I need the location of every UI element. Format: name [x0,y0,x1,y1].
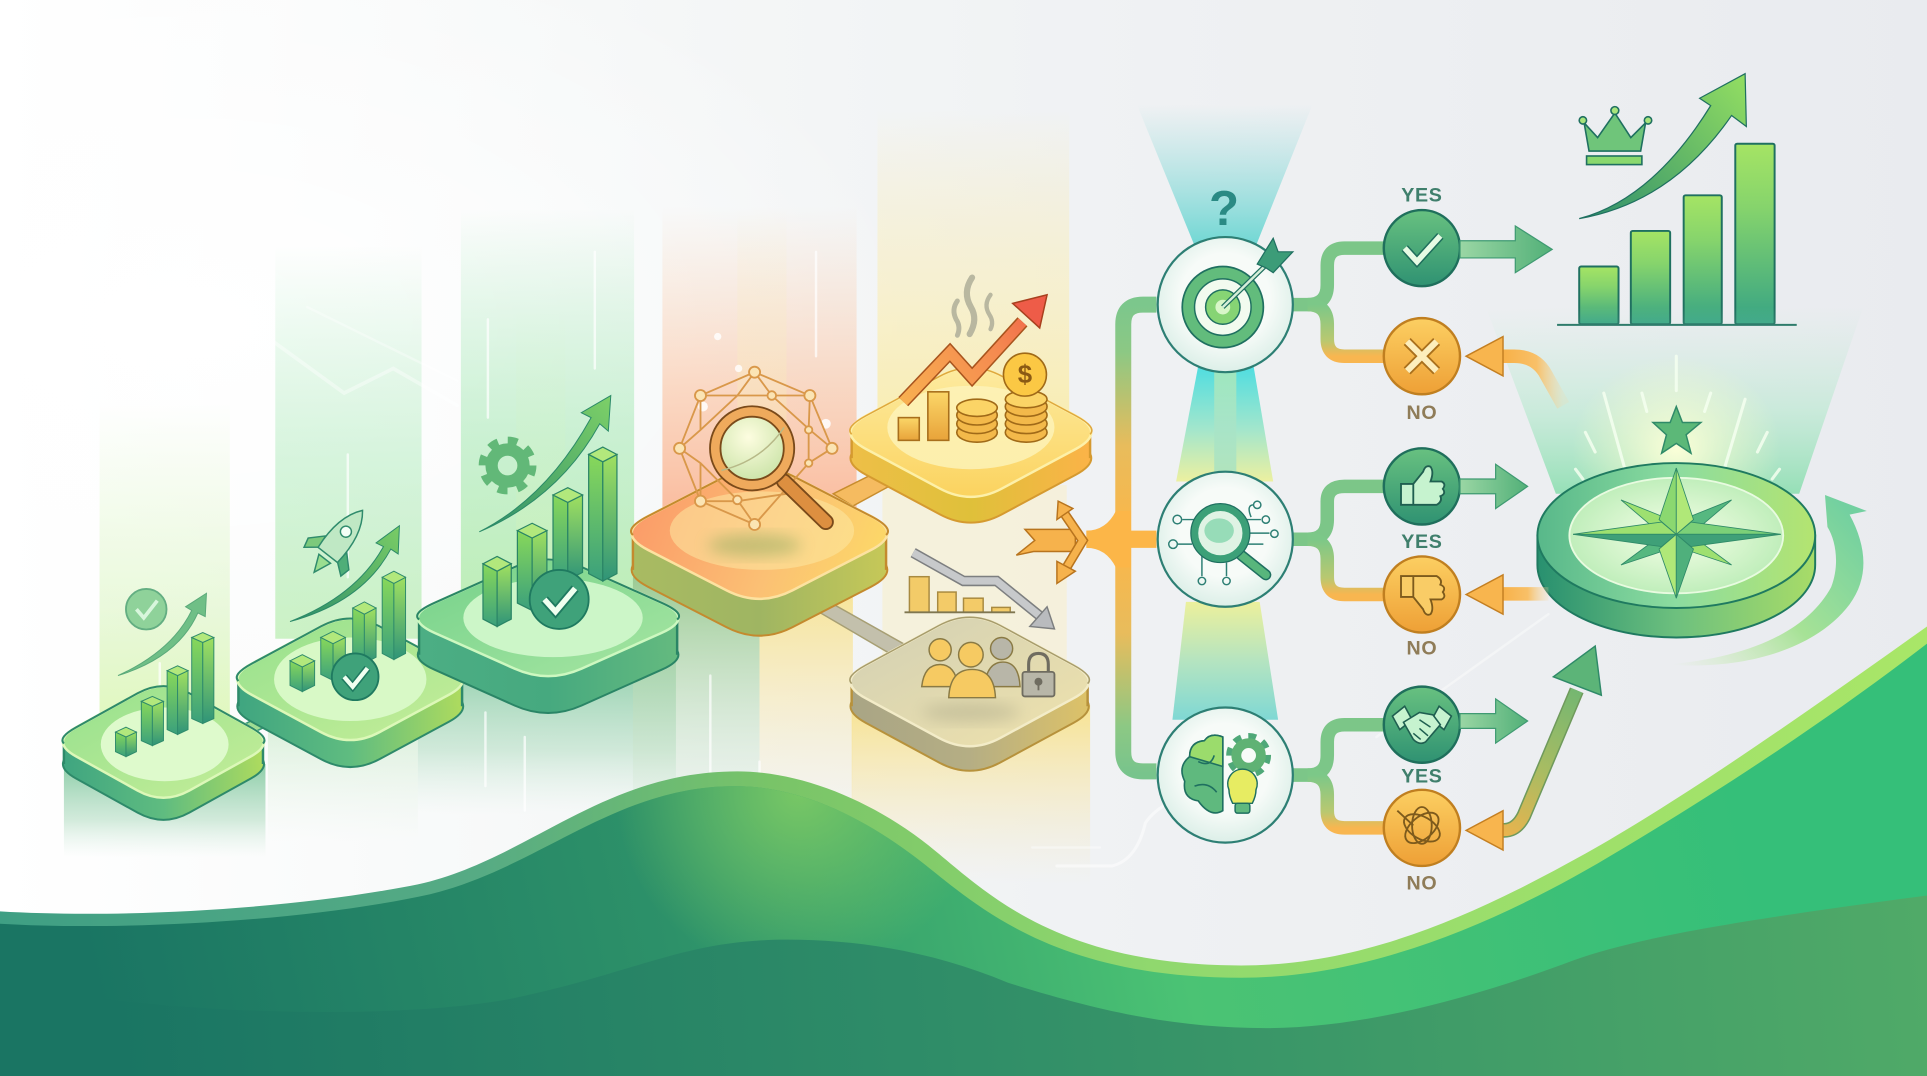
icon: crown [1579,107,1652,165]
yes label 1: YES [1401,184,1442,206]
bar chart [116,633,214,757]
flow bus to decision circles [1086,305,1156,771]
panel: platform 3 [417,396,679,713]
arrow: falling trend [913,553,1054,629]
bar chart [1579,144,1775,324]
icon: steam [954,278,992,335]
icon: rocket [294,494,383,588]
icon: bulb [1228,769,1257,813]
panel: connector bands [804,464,907,653]
icon: gear [1229,736,1268,775]
bar chart [898,392,949,440]
icon: people [922,637,1020,698]
bar chart [483,447,617,626]
compass light beam [1486,307,1863,494]
arrow: circular [1666,495,1867,666]
bar chart: decline [905,577,1015,612]
decision beams [1137,104,1313,720]
icon: compass star [1573,468,1781,598]
icon: coins [957,353,1047,442]
no label 1: NO [1407,402,1437,424]
no node: thumbs down [1384,556,1460,633]
green wave footer [0,626,1927,1076]
icon: check [332,653,379,700]
panel: platform 6 (team) [850,553,1089,771]
arrow: no 1 [1466,337,1563,405]
no label 2: NO [1407,638,1437,660]
bar chart [290,571,406,692]
yes node: handshake [1384,687,1460,763]
icon: magnifier [715,411,826,522]
no node: tangle [1384,790,1460,866]
background light columns [64,111,1090,884]
arrow: yes 1 [1460,226,1552,273]
branch lines [1290,248,1389,828]
panel: platform 1 [62,589,264,820]
yes node: check [1384,210,1460,286]
icon: brain [1182,735,1223,813]
arrow: no 3 to compass [1466,646,1601,850]
arrow: growth [290,526,399,622]
decision circle: brain, gear, bulb [1158,708,1293,843]
light streaks and circuit traces [160,252,1548,866]
icon: check [530,570,589,629]
icon: lock [1022,653,1054,696]
question mark: ? [1209,182,1239,236]
panel: compass platform [1486,307,1867,666]
arrow: yes 3 [1460,699,1528,743]
arrow: growth [479,396,611,532]
panel: platform 5 (profit) [850,278,1092,523]
icon: check [126,589,167,630]
panel: top-right growth chart [1557,74,1797,325]
arrow: yes 2 [1460,464,1528,509]
arrow: growth [118,593,206,676]
panel: platform 2 [237,494,464,767]
icon: star [1653,407,1701,453]
icon: network [674,367,838,530]
dollar label: $ [1018,361,1032,389]
icon: gear [482,440,533,491]
yes label 3: YES [1401,765,1442,787]
arrow: orange fork [1016,501,1083,583]
decision circle: target [1158,237,1293,372]
yes label 2: YES [1401,531,1442,553]
no label 3: NO [1407,872,1437,894]
panel: platform 4 (analysis) [631,367,888,636]
arrow: rising zigzag [903,295,1047,402]
no node: cross [1384,318,1460,394]
arrow: no 2 [1466,575,1548,614]
panel: connector tabs between green platforms [246,574,692,731]
arrow: growth [1579,74,1746,219]
decision circle: AI magnifier [1158,472,1293,607]
compass disc [1537,536,1815,637]
yes node: thumbs up [1384,448,1460,524]
